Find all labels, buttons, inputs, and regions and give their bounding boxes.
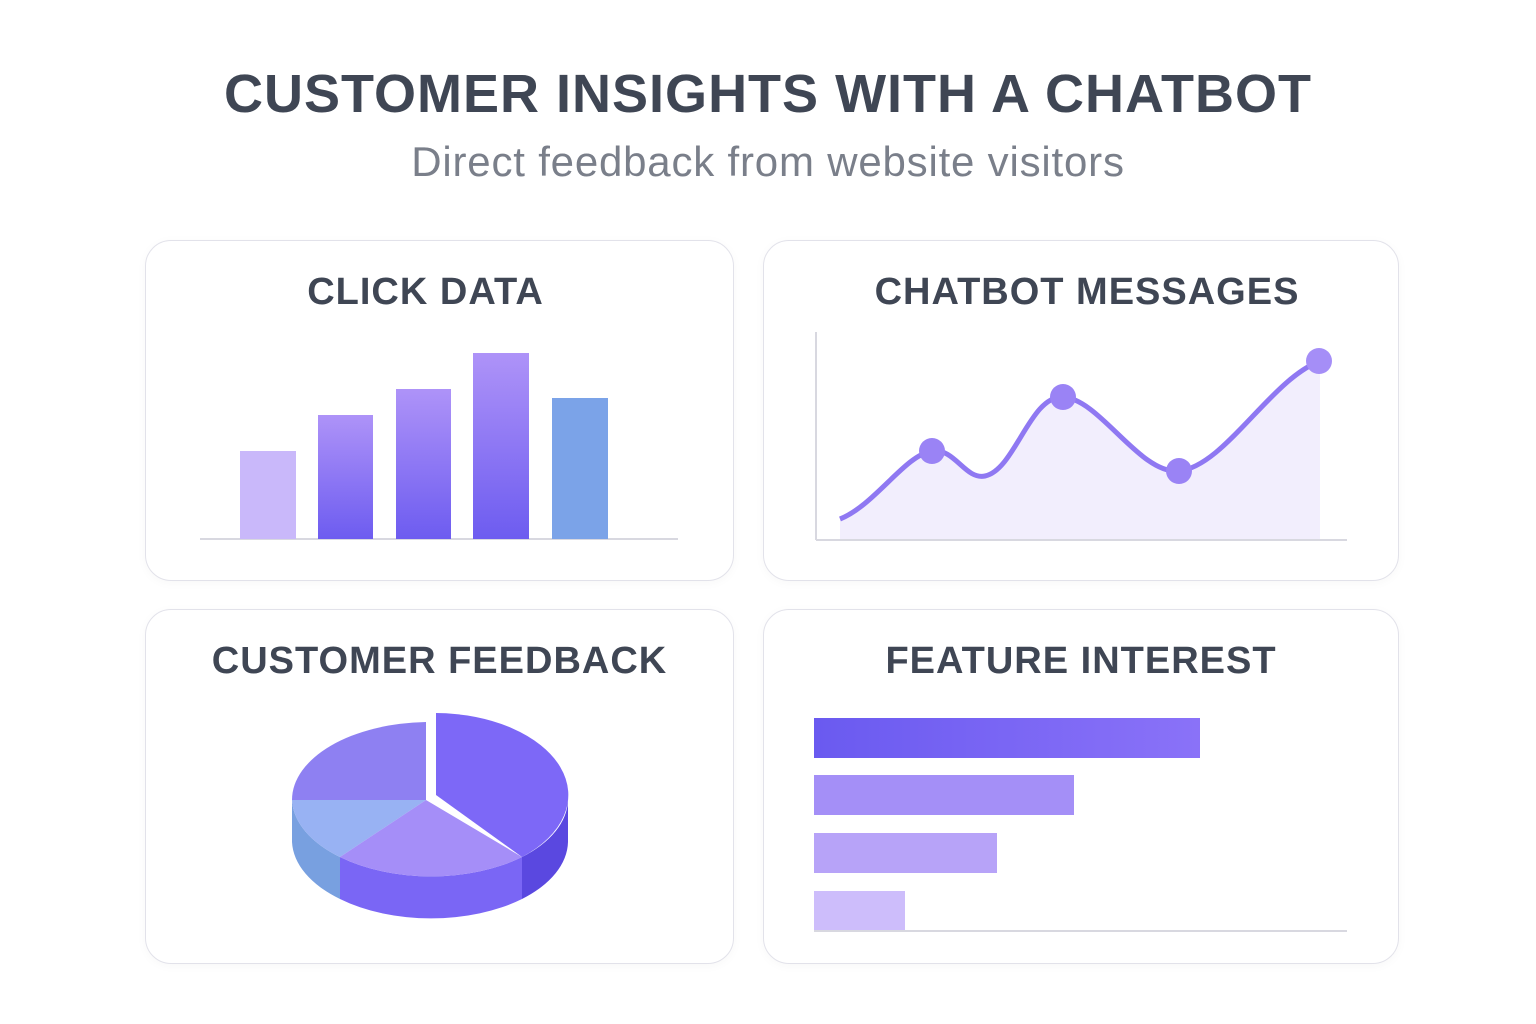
bar chart: click data: [200, 353, 678, 539]
heading: feature interest: FEATURE INTEREST: [885, 640, 1277, 682]
title: CUSTOMER INSIGHTS WITH A CHATBOT: [224, 64, 1312, 124]
heading: click data: CLICK DATA: [307, 271, 544, 313]
panel: click data: [145, 240, 734, 581]
horizontal bar chart: feature interest: [814, 718, 1347, 931]
heading: customer feedback: CUSTOMER FEEDBACK: [212, 640, 667, 682]
panel: chatbot messages: [763, 240, 1399, 581]
panel: customer feedback: [145, 609, 734, 964]
line chart: chatbot messages: [816, 332, 1347, 540]
heading: chatbot messages: CHATBOT MESSAGES: [875, 271, 1299, 313]
panel: feature interest: [763, 609, 1399, 964]
pie chart: customer feedback: [292, 713, 568, 918]
subtitle: Direct feedback from website visitors: [411, 138, 1125, 185]
